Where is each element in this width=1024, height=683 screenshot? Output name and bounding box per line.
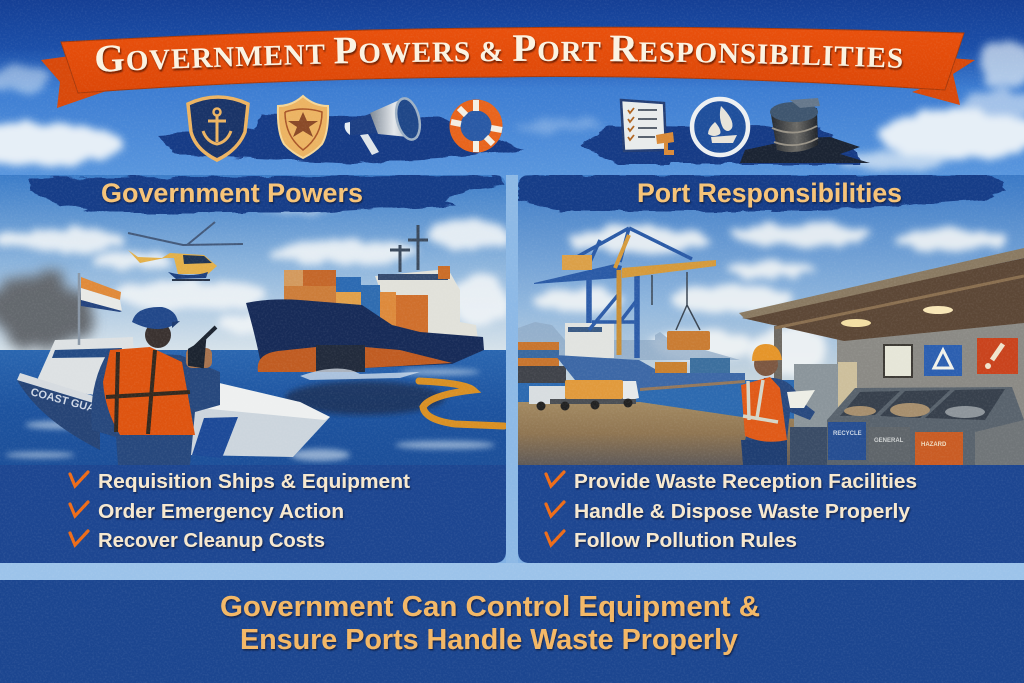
icon: oil barrel <box>770 98 820 152</box>
icon: checklist <box>621 100 674 155</box>
conclusion line 1: Government Can Control Equipment & <box>220 591 760 623</box>
panel heading brush <box>518 175 1005 211</box>
skyline <box>518 322 740 360</box>
waste shed <box>739 248 1024 465</box>
banner tails <box>41 56 975 108</box>
smoke <box>0 274 92 350</box>
sea foam <box>5 369 495 461</box>
panel: government powers <box>0 175 510 563</box>
oil boom <box>419 381 504 426</box>
icon: police badge <box>278 96 328 158</box>
sign: notice <box>884 345 912 377</box>
brush behind right icons <box>582 125 860 164</box>
waste bins <box>827 387 1024 465</box>
waste bins: HAZARD <box>921 442 947 448</box>
banner ribbon <box>61 27 964 93</box>
ship waterline <box>258 347 452 372</box>
conclusion line 2: Ensure Ports Handle Waste Properly <box>240 624 738 656</box>
waste bins: GENERAL <box>874 438 904 444</box>
band background <box>0 580 1024 683</box>
shed ceiling <box>742 258 1024 341</box>
bullet: order emergency action: Order Emergency Action <box>98 500 344 523</box>
bullet: handle and dispose: Handle & Dispose Waste Properly <box>574 500 911 523</box>
boat stripes <box>192 417 238 458</box>
shed roof edge <box>739 248 1024 319</box>
left stacked containers <box>518 342 566 383</box>
boat hull front <box>190 402 330 457</box>
ship containers <box>284 270 428 340</box>
quay <box>518 402 794 465</box>
waste bins: RECYCLE <box>833 431 862 437</box>
photo clouds <box>535 224 1005 374</box>
icon: life ring <box>451 100 502 152</box>
icon: oil slick <box>740 137 870 163</box>
gantry crane <box>534 228 716 358</box>
icon: water drop <box>692 99 748 155</box>
heading: Port Responsibilities <box>637 178 902 208</box>
hull lettering: COAST GUARD <box>29 386 111 419</box>
title banner <box>41 26 975 108</box>
truck <box>529 380 639 410</box>
panel heading brush <box>30 175 506 213</box>
helicopter <box>128 222 243 280</box>
background clouds <box>0 43 1024 169</box>
boat cabin <box>38 337 135 400</box>
bullet: waste reception: Provide Waste Reception Facilities <box>574 470 917 493</box>
title: GOVERNMENT POWERS & PORT RESPONSIBILITIES <box>96 35 904 74</box>
list panel <box>518 465 1024 563</box>
docked ship <box>555 323 745 391</box>
oil slick on water <box>285 381 445 415</box>
icon: megaphone <box>345 96 424 155</box>
cargo ship <box>246 225 484 372</box>
light divider band <box>0 563 1024 580</box>
harbor water <box>518 380 794 419</box>
bullet: requisition: Requisition Ships & Equipment <box>98 470 410 493</box>
machine unit <box>790 362 857 465</box>
list panel <box>0 465 506 563</box>
heading: Government Powers <box>101 178 363 208</box>
foam at bow <box>300 368 420 380</box>
officer in orange vest <box>91 307 220 465</box>
shed wall <box>837 318 1024 465</box>
bullet: pollution rules: Follow Pollution Rules <box>574 529 797 552</box>
panel photo background <box>518 175 1024 380</box>
bottom band <box>0 580 1024 683</box>
brush behind left icons <box>160 115 524 163</box>
flag pole and flag <box>79 273 122 345</box>
ship superstructure <box>375 269 478 340</box>
boat hull side <box>17 380 100 450</box>
shed post <box>774 326 782 384</box>
bullet: recover costs: Recover Cleanup Costs <box>98 529 325 552</box>
photo clouds <box>0 212 506 337</box>
sign: recycling <box>924 345 962 376</box>
vertical gap between panels <box>506 175 518 565</box>
icon: anchor shield <box>188 97 248 160</box>
coast guard boat <box>17 273 330 458</box>
ship hull <box>246 299 484 371</box>
sea <box>0 350 506 465</box>
sign: warning <box>977 338 1018 374</box>
panel: port responsibilities <box>518 175 1024 563</box>
panel photo background <box>0 175 506 350</box>
worker in hard hat <box>741 344 815 465</box>
